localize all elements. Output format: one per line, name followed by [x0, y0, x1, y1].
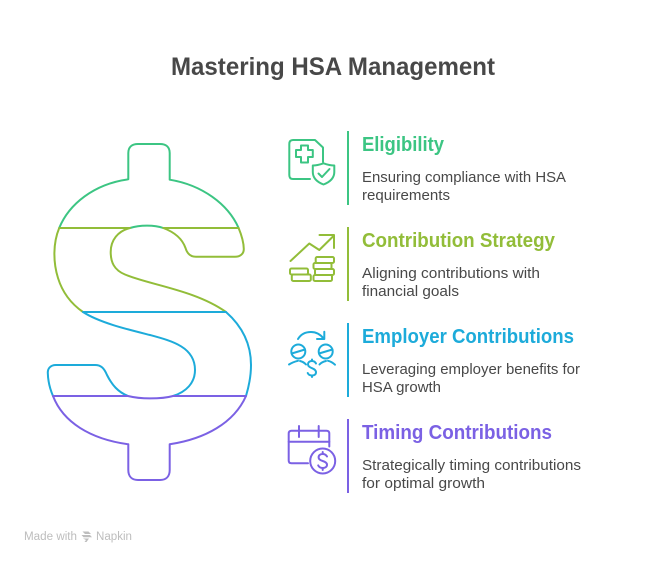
description: requirements: [362, 188, 450, 204]
item: eligibility: [289, 131, 566, 205]
icon: calendar with dollar coin: [289, 426, 335, 474]
divider line: [347, 419, 349, 493]
dollar segment: timing contributions (purple): [53, 396, 246, 480]
dollar segment: eligibility (green): [59, 144, 239, 228]
description: for optimal growth: [362, 476, 485, 492]
description: Ensuring compliance with HSA: [362, 170, 566, 186]
item: employer contributions: [289, 323, 580, 397]
description: Aligning contributions with: [362, 266, 540, 282]
heading: Employer Contributions: [362, 326, 574, 348]
dollar segment: contribution strategy (olive): [54, 228, 244, 312]
description: Strategically timing contributions: [362, 458, 581, 474]
dollar sign diagram: [48, 144, 251, 480]
description: HSA growth: [362, 380, 441, 396]
heading: Contribution Strategy: [362, 230, 556, 252]
item: contribution strategy: [290, 227, 556, 301]
icon: napkin logo: [82, 532, 92, 542]
dollar segment: employer contributions (blue): [48, 312, 251, 396]
description: financial goals: [362, 284, 459, 300]
divider line: [347, 131, 349, 205]
icon: growth chart with coins: [290, 235, 334, 281]
icon: medical document with shield: [289, 140, 334, 184]
divider line: [347, 227, 349, 301]
divider line: [347, 323, 349, 397]
heading: Timing Contributions: [362, 422, 552, 444]
footer: made with napkin: [24, 531, 132, 543]
footer: made with napkin: Napkin: [96, 531, 132, 543]
heading: Eligibility: [362, 134, 445, 156]
footer: made with napkin: Made with: [24, 531, 77, 543]
icon: two people exchanging money: [289, 332, 335, 377]
title: Mastering HSA Management: [171, 53, 496, 81]
description: Leveraging employer benefits for: [362, 362, 580, 378]
item: timing contributions: [289, 419, 581, 493]
